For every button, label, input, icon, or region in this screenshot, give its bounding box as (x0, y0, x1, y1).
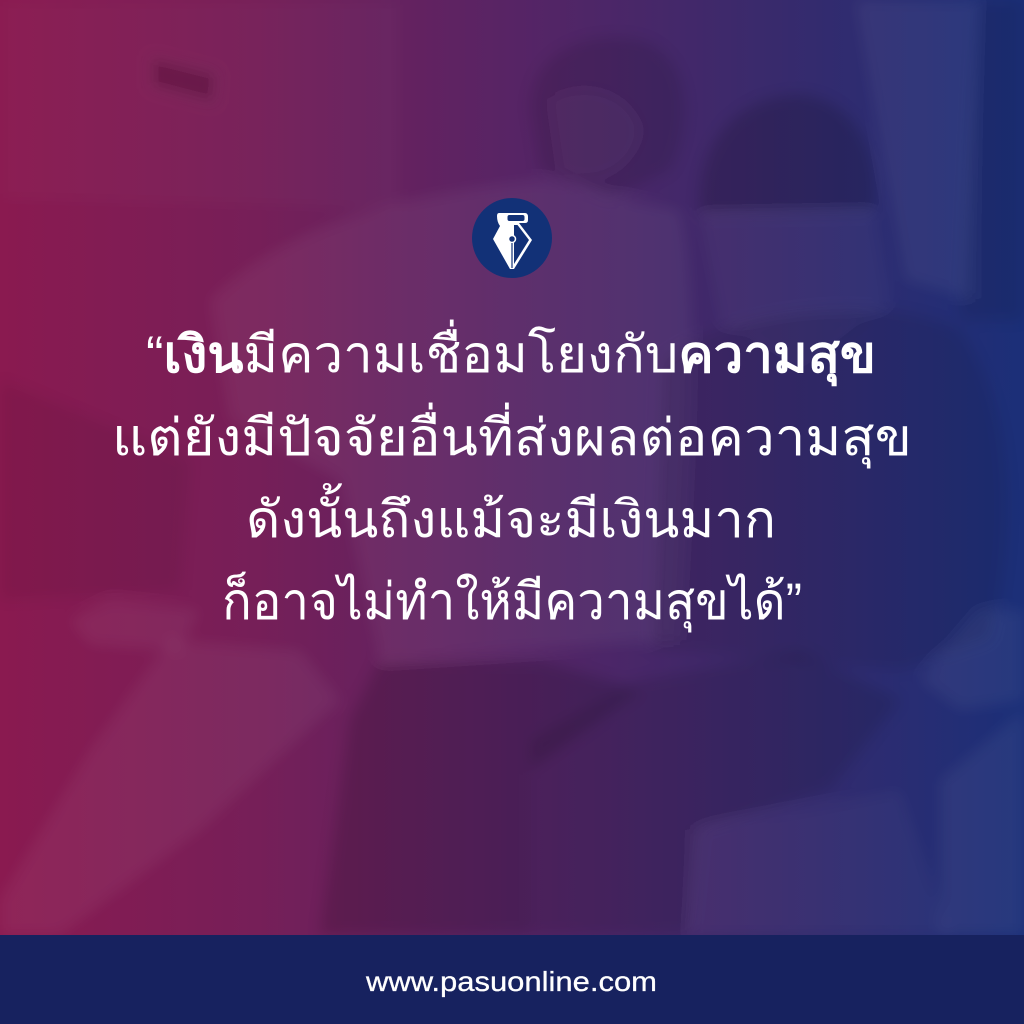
website url: www.pasuonline.com (365, 966, 657, 997)
icon: fountain pen nib (493, 213, 532, 269)
quote line 4: ก็อาจไม่ทำให้มีความสุขได้” (222, 572, 802, 633)
quote line 2: แต่ยังมีปัจจัยอื่นที่ส่งผลต่อความสุข (112, 403, 912, 469)
footer bar (0, 935, 1024, 1024)
quote text (112, 320, 912, 633)
quote line 1: “เงินมีความเชื่อมโยงกับ ความสุข (146, 320, 876, 387)
logo: pen nib badge (472, 198, 552, 278)
quote line 3: ดังนั้นถึงแม้จะมีเงินมาก (246, 483, 776, 548)
